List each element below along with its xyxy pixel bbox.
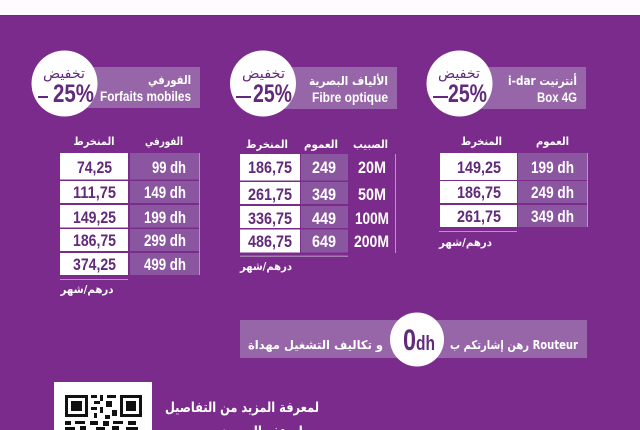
table: forfaits mobiles: 99 dh	[152, 158, 186, 177]
table: fibre optique: 449	[312, 209, 336, 228]
table: forfaits mobiles: 199 dh	[144, 208, 186, 227]
table: fibre optique	[239, 138, 396, 273]
table: box 4G: 249 dh	[531, 183, 574, 202]
callout: routeur 0dh: 0	[403, 324, 416, 357]
table: box 4G: 149,25	[457, 158, 501, 177]
table: forfaits mobiles: 149,25	[73, 208, 116, 227]
callout: routeur 0dh	[240, 312, 587, 366]
table: forfaits mobiles: 74,25	[77, 158, 112, 177]
table: fibre optique: 649	[312, 232, 336, 251]
discount badge: 25%	[253, 80, 292, 108]
heading banner: box 4G: i-dar أنترنيت	[508, 73, 577, 88]
table: fibre optique: 186,75	[248, 158, 292, 177]
table: forfaits mobiles: 186,75	[73, 231, 116, 250]
table: fibre optique: 100M	[355, 209, 389, 228]
table: box 4G: 186,75	[457, 183, 501, 202]
heading banner: box 4G: Box 4G	[537, 89, 577, 105]
table: fibre optique: المنخرط	[246, 138, 288, 151]
callout: routeur 0dh: رهن إشارتكم ب Routeur	[450, 338, 578, 352]
table: fibre optique: 349	[312, 185, 336, 204]
text: more details: لمعرفة المزيد من التفاصيل	[165, 400, 319, 416]
table: fibre optique: الصبيب	[353, 138, 388, 151]
table: forfaits mobiles: المنخرط	[74, 135, 114, 148]
callout: routeur 0dh: dh	[416, 333, 435, 355]
table: forfaits mobiles: 374,25	[73, 255, 116, 274]
panel: box 4G	[426, 50, 588, 249]
table: forfaits mobiles: الفورفي	[145, 135, 183, 148]
table: fibre optique: درهم/شهر	[239, 260, 292, 273]
discount badge: 25%	[53, 80, 94, 108]
text: more details	[165, 400, 319, 430]
table: forfaits mobiles: 149 dh	[144, 183, 186, 202]
table: fibre optique: العموم	[304, 138, 338, 151]
table: forfaits mobiles: 111,75	[73, 183, 116, 202]
table: forfaits mobiles: درهم/شهر	[60, 283, 114, 296]
table: forfaits mobiles	[60, 135, 200, 296]
heading banner: box 4G	[460, 67, 586, 109]
discount badge	[32, 50, 98, 116]
heading banner: forfaits mobiles	[64, 67, 200, 108]
table: fibre optique: 20M	[358, 158, 386, 177]
callout: routeur 0dh: و تكاليف التشغيل مهداة	[248, 338, 383, 353]
table: box 4G: 349 dh	[531, 207, 574, 226]
table: fibre optique: 200M	[354, 232, 389, 251]
table: box 4G: 199 dh	[531, 158, 574, 177]
heading banner: fibre optique	[263, 67, 397, 109]
discount badge	[230, 50, 296, 116]
table: fibre optique: 486,75	[248, 232, 292, 251]
table: box 4G: المنخرط	[461, 135, 502, 148]
heading banner: fibre optique: الألياف البصرية	[309, 73, 388, 88]
heading banner: forfaits mobiles: الفورفي	[148, 73, 191, 88]
heading banner: fibre optique: Fibre optique	[312, 89, 388, 105]
panel: fibre optique	[230, 50, 397, 273]
discount badge: تخفيض	[43, 66, 85, 82]
panel: forfaits mobiles	[32, 50, 200, 296]
discount badge: 25%	[448, 80, 487, 108]
table: fibre optique: 249	[312, 158, 336, 177]
discount badge: تخفيض	[438, 66, 480, 82]
table: forfaits mobiles: 499 dh	[144, 255, 186, 274]
QR code	[54, 382, 152, 430]
table: box 4G: العموم	[536, 135, 569, 148]
heading banner: forfaits mobiles: Forfaits mobiles	[100, 88, 191, 104]
table: fibre optique: 261,75	[248, 185, 292, 204]
discount badge	[426, 50, 492, 116]
table: fibre optique: 50M	[358, 185, 386, 204]
table: forfaits mobiles: 299 dh	[144, 231, 186, 250]
table: fibre optique: 336,75	[248, 209, 292, 228]
discount badge: تخفيض	[242, 66, 285, 82]
table: box 4G	[438, 135, 588, 249]
table: box 4G: درهم/شهر	[438, 236, 492, 249]
table: box 4G: 261,75	[457, 207, 501, 226]
